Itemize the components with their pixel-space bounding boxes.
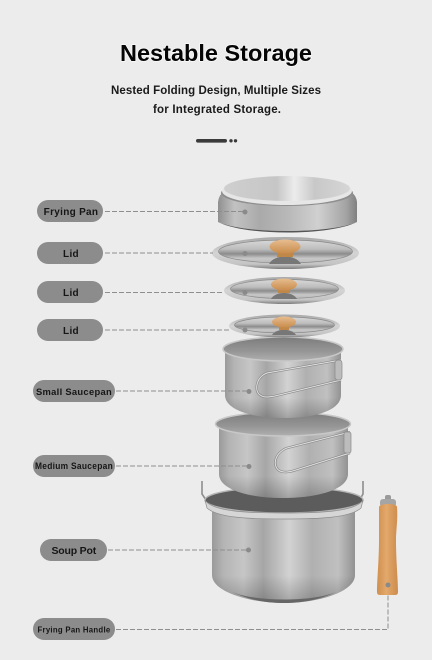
- soup pot with bail handle: [202, 481, 363, 603]
- label: Frying Pan: [37, 200, 103, 222]
- title: Nestable Storage: [120, 40, 312, 66]
- label: Frying Pan: Frying Pan: [44, 207, 98, 218]
- label: Soup Pot: [40, 539, 107, 561]
- label: Lid 3: Lid: [63, 326, 79, 337]
- label: Lid 3: [37, 319, 103, 341]
- small saucepan: [223, 337, 343, 418]
- divider mark: [196, 139, 237, 143]
- label: Medium Saucepan: Medium Saucepan: [35, 461, 113, 471]
- subtitle: Nested Folding Design, Multiple Sizes: [111, 85, 321, 97]
- label: Lid 2: [37, 281, 103, 303]
- lid 3: [229, 314, 340, 338]
- lid 1: [212, 237, 359, 269]
- callout lines and dots: [105, 210, 390, 630]
- label: Lid 1: [37, 242, 103, 264]
- subtitle: for Integrated Storage.: [153, 104, 281, 116]
- label: Small Saucepan: Small Saucepan: [36, 387, 112, 398]
- frying pan: [218, 176, 357, 232]
- medium saucepan: [216, 412, 351, 498]
- label: Lid 2: Lid: [63, 288, 79, 299]
- label: Lid 1: Lid: [63, 249, 79, 260]
- label: Soup Pot: Soup Pot: [52, 545, 97, 557]
- label: Frying Pan Handle: [33, 618, 115, 640]
- label: Small Saucepan: [33, 380, 115, 402]
- label: Frying Pan Handle: Frying Pan Handle: [38, 624, 110, 634]
- subtitle: [111, 85, 321, 116]
- handle for frying pan: [377, 495, 398, 595]
- label: Medium Saucepan: [33, 455, 115, 477]
- lid 2: [224, 277, 345, 304]
